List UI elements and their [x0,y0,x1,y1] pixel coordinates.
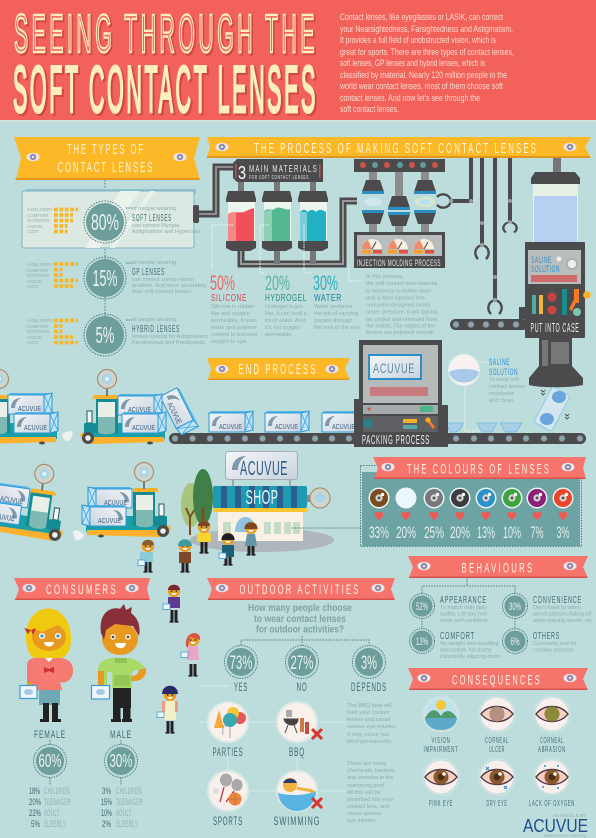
text: silicone: 50% [210,272,235,295]
percentages: 7% [530,523,544,542]
hybrid ratings: OUTDOOR [27,329,49,334]
text: silicone: permeable. It uses [211,318,257,324]
machine: 3 main materials: FOR SOFT CONTACT LENSES [249,175,309,181]
truck: loading top [80,370,166,444]
text: bbq warning: lenses and cause [347,717,391,723]
text: bbq warning: It may cause you [347,732,389,738]
percentages: 20% [396,523,416,542]
item: appearance: outfits. Let you feel [440,612,487,618]
item: others: 6% [510,636,520,648]
text: injection process: the soft contact lens material [366,281,437,287]
robot arms [437,158,520,318]
text: injection process: and is then injected into [366,296,425,302]
figure: female: FEMALE [34,729,66,741]
saline solution callout: To keep soft [489,377,520,383]
banner: outdoor: OUTDOOR ACTIVITIES [240,582,360,597]
icon: sports: SPORTS [213,816,243,828]
banner: end process [207,358,350,380]
text: hydrogel: it's not oxygen [265,325,301,331]
shop [181,452,334,552]
hybrid ratings: VISION [27,335,42,340]
question: for outdoor activities? [256,624,344,636]
panel: consumers: TEENAGER [116,797,143,808]
person: navy hat [157,686,178,734]
stat: 15 percent GP lenses: can correct certain vision [132,277,194,283]
icon: swimming [274,771,322,828]
item: appearance: To match with daily [440,605,487,611]
icon: dry eye: DRY EYE [486,798,508,808]
stat: 80 percent soft lenses: SOFT LENSES [132,213,172,224]
icon: swimming: SWIMMING [274,816,320,828]
credit: acuvue: ACUVUE [523,816,588,836]
contact lens cases on conveyor [446,423,522,432]
icon: corneal abrasion [534,696,570,754]
female age breakdown: ADULT [44,808,60,819]
truck: front top: ACUVUE [18,404,41,413]
intro paragraph: soft contact lenses. [340,104,399,115]
female age breakdown [29,786,71,830]
truck: delivery lower left [0,456,72,543]
saline solution callout: contact lenses [489,384,525,390]
machine: injection molding: INJECTION MOLDING PROCESS [357,258,441,269]
saline solution callout: SALINE [489,357,510,367]
text: bbq warning: melt your contact [347,710,390,716]
text: silicone: Silicone is rubber- [211,304,256,310]
stat: depends [351,646,387,694]
text: bbq warning: blind permanently. [347,739,393,745]
percentages: 13% [477,523,495,542]
stat: no [286,646,318,694]
saline solution callout: and clean. [489,398,515,404]
text: hydrogel: Hydrogel is gel- [265,304,304,310]
truck: delivery lower right: ACUVUE [104,498,127,507]
item: others: OTHERS [533,631,560,642]
text: hydrogel: like, it can hold a [265,311,308,317]
panel: types of contact lenses [14,137,209,356]
text: hydrogel: 20% [265,272,290,295]
customers at shop [138,521,258,734]
text: swimming warning: swimming pool. [347,783,386,789]
stat: female 60 percent [34,740,66,785]
trees [181,469,213,535]
stat: 80 percent soft lenses: 80% [91,209,119,235]
item: appearance: 52% [416,601,428,613]
intro paragraph: classified by material. Nearly 120 million people in the [340,70,507,81]
item: others [502,628,577,654]
text: hydrogel [265,272,308,338]
boxes on conveyor: ACUVUE [219,422,242,431]
intro paragraph: great for sports. There are three types of contact lenses, [340,47,514,58]
male age breakdown: ELDERLY [116,819,138,830]
figure: male [92,604,146,741]
tank: water [298,191,328,251]
male age breakdown [101,786,143,830]
item: convenience: Don't have to worry [533,605,581,611]
truck: delivery lower right [73,462,171,540]
person: pink [181,633,200,677]
hybrid ratings: COST [27,340,40,345]
truck: delivery lower right: ACUVUE [98,516,121,525]
banner: colours [373,457,586,479]
text: injection process: is heated to a molten state [366,288,432,294]
stat: male 30 percent: 30% [110,751,132,771]
boxes on conveyor [209,411,366,432]
GP ratings: VISION [27,279,42,284]
person: blue dress [244,522,258,556]
panel: consumers [14,578,150,830]
text: swimming warning: absorbed into your [347,797,393,803]
item: others: Curiousity and for [533,641,577,647]
icon: vision impairment [423,696,459,754]
intro paragraph: It provides a full field of unobstructed vision, which is [340,35,496,46]
item: comfort: 13% [416,636,428,648]
male age breakdown: 3% [102,786,111,797]
GP ratings: COMFORT [27,268,49,273]
icon: dry eye [479,759,515,808]
machine: packing process: PACKING PROCESS [362,433,430,447]
text: water: 30% [313,272,338,295]
text: water: the job of carrying [314,311,358,317]
header panel [0,0,596,128]
stat: 5 percent hybrid lenses [84,314,209,356]
item: appearance: more self-confident. [440,618,490,624]
item: comfort: discomfort. No frame [440,648,492,654]
saline solution callout: moisturize [489,391,514,397]
panel: consumers: CHILDREN [44,786,70,797]
text: water: the lens to the eye. [314,325,362,331]
banner: outdoor [207,578,395,600]
item: appearance [410,594,490,624]
item: comfort: No weight and resulting [440,641,498,647]
person: teal coat [219,533,235,566]
tilted box: ACUVUE [165,401,184,425]
male age breakdown: 2% [102,819,111,830]
machine: put into case [519,158,591,387]
icon: corneal ulcer: CORNEAL [485,735,509,745]
banner: consumers [14,578,150,600]
banner: end process: END PROCESS [238,361,318,378]
text: silicone: like and oxygen [211,311,250,317]
panel: consumers: TEENAGER [44,797,71,808]
female age breakdown: ELDERLY [44,819,66,830]
GP ratings: A.DELIVERY [27,262,53,267]
stat: 80 percent soft lenses: of people wearing [132,206,176,212]
machine: injection molding [354,159,445,269]
saline solution callout [448,354,525,431]
soft lens ratings [27,207,78,234]
banner: behaviours [408,556,588,578]
person: purple [163,585,180,623]
banner: types: CONTACT LENSES [58,159,154,176]
percentages: 33% [369,523,389,542]
truck: front top: ACUVUE [24,423,47,432]
text: injection process: be cooled and removed from [366,317,438,323]
icon: vision impairment: IMPAIRMENT [424,744,458,754]
person: light blue [138,540,154,573]
connector lines [200,686,345,791]
panel: behaviours [408,556,594,660]
machine: packing process [354,340,448,447]
text: hydrogel: HYDROGEL [265,292,307,304]
female age breakdown: 5% [31,819,40,830]
machine: 3 main materials [233,159,323,183]
machine: 3 main materials: 3 [238,163,246,183]
icon: bbq [277,702,322,759]
icon: parties: PARTIES [212,747,244,759]
text: injection process: the molds. The edges of the [366,324,435,330]
text: swimming warning [347,761,396,824]
item: convenience: about glasses falling off [533,612,592,618]
stat: depends: 3% [361,653,377,674]
conveyor: lower [169,433,586,444]
percentages: 10% [503,523,521,542]
person: brown coat [178,539,192,573]
text: hydrogel: lot of water. And [265,318,305,324]
icon: sports [208,771,248,828]
hearts [375,512,567,520]
truck: front top [0,370,73,444]
figure: male: MALE [110,729,132,741]
soft lens ratings: COMFORT [27,213,49,218]
banner: behaviours: BEHAVIOURS [462,560,534,576]
stat: 5 percent hybrid lenses: HYBRID LENSES [132,324,180,335]
stat: 15 percent GP lenses: problem. And more accurately [132,283,207,289]
icon: parties [208,702,248,759]
female age breakdown: 22% [29,808,41,819]
stat: 5 percent hybrid lenses: Keratoconus and Presbyopia. [132,340,206,346]
text: silicone: water and polymer [210,325,257,331]
percentages: 20% [450,523,470,542]
conveyor: upper [450,319,528,330]
saline solution callout: SOLUTION [489,367,518,377]
stat: yes [224,646,258,694]
icon: corneal abrasion: ABRASION [538,744,566,754]
GP ratings: COST [27,284,40,289]
intro paragraph: your Nearsightedness, Farsightedness and Astigmatism. [340,24,513,35]
stat: male 30 percent [104,740,138,785]
stat: 5 percent hybrid lenses: of people wearing [132,317,176,323]
question: to wear contact lenses [254,614,346,625]
text: swimming warning: and amoeba in the [347,775,393,781]
text: swimming warning: There are many [347,761,387,767]
female age breakdown: 20% [29,797,41,808]
text: silicone: SILICONE [211,292,247,304]
stat: no: 27% [290,653,314,674]
soft lens ratings: VISION [27,224,42,229]
boxes on conveyor: ACUVUE [332,422,355,431]
stat: 15 percent GP lenses: than soft contact lenses. [132,289,193,295]
item: convenience: 30% [509,601,521,613]
panel: consequences [408,668,588,838]
icon: corneal abrasion: CORNEAL [540,735,564,745]
text: water [313,272,362,331]
percentages: 25% [424,523,444,542]
banner: types [14,137,200,180]
text: swimming warning: All this will be [347,790,381,796]
text: injection process: lenses are polished smooth. [366,330,436,336]
intro paragraph: soft lenses, GP lenses and hybrid lenses, which is [340,58,485,69]
truck: delivery lower left: ACUVUE [0,494,24,506]
icon: pink eye: PINK EYE [429,798,453,808]
female age breakdown: 18% [29,786,40,797]
banner: consumers: CONSUMERS [46,582,118,597]
machine: put into case: SOLUTION [531,264,560,274]
soft lens ratings: OUTDOOR [27,218,49,223]
text: swimming warning: cause serious [347,811,382,817]
text: bbq warning: The BBQ heat will [347,703,392,709]
stat: 80 percent soft lenses: can correct Myopia, [132,223,181,229]
stat: female 60 percent: 60% [38,751,62,771]
shop sign: ACUVUE [240,458,288,480]
soft lens panel [22,189,196,248]
stat: 80 percent soft lenses: Astigmatism and Hyperopia. [132,229,202,235]
icon: pink eye [423,759,459,808]
stat: depends: DEPENDS [351,682,387,694]
credit: acuvue: AN ARTICLE BY [553,813,586,818]
intro paragraph [339,12,514,115]
machine: 3 main materials: MAIN MATERIALS [249,164,318,175]
intro paragraph: contact lenses. And now let's see through the [340,93,480,104]
shop sign [226,452,298,488]
text: water: oxygen through [314,318,353,324]
boxes on conveyor: ACUVUE [275,422,298,431]
text: water: Water performs [314,304,353,310]
text: silicone: oxygen to eye. [211,339,248,345]
text: swimming warning: chemicals, bacteria [347,768,396,774]
icon: lack of oxygen [529,759,575,808]
item: comfort: COMFORT [440,631,475,642]
tilted box [160,387,199,436]
text: hydrogel: permeable. [265,332,293,338]
intro paragraph: Contact lenses, like eyeglasses or LASIK, can correct [340,12,503,23]
icon: corneal ulcer [479,696,515,754]
item: others: cosplay purpose. [533,648,576,654]
tank: hydrogel [262,191,292,251]
male age breakdown: 10% [101,808,112,819]
stat: 15 percent GP lenses: GP LENSES [132,267,165,278]
GP ratings: OUTDOOR [27,273,49,278]
stat: 15 percent GP lenses: 15% [92,265,118,291]
person: yellow [197,521,211,554]
panel: outdoor activities [200,578,397,828]
machine: packing process: ACUVUE [373,360,415,376]
text: water: WATER [314,292,342,304]
stat: 5 percent hybrid lenses: 5% [96,322,114,348]
title [13,4,320,128]
icon: bbq: BBQ [289,747,305,759]
panel: consumers: CHILDREN [116,786,142,797]
item: comfort: constantly slipping down. [440,654,503,660]
panel: colours of lenses [360,457,586,546]
banner: types: THE TYPES OF [67,141,145,158]
truck: loading top: ACUVUE [132,423,155,432]
male age breakdown: 15% [101,797,112,808]
material callout lines [212,224,363,281]
question [248,603,352,636]
truck: loading top: ACUVUE [128,405,151,414]
blister pack [534,387,570,431]
question: How many people choose [248,603,352,614]
icon: vision impairment: VISION [432,735,450,745]
soft lens ratings: A.DELIVERY [27,207,53,212]
text: bbq warning [347,703,397,745]
hybrid ratings [27,318,78,345]
text: injection process [366,274,438,336]
stat: 80 percent soft lenses [84,201,202,243]
intro paragraph: world wear contact lenses, most of them choose soft [339,81,503,92]
icon: corneal ulcer: ULCER [489,744,505,754]
stat: 15 percent GP lenses [84,257,207,299]
text: injection process: under pressure. It will quickly [366,310,438,316]
text: silicone: content to transmit [211,332,257,338]
shop link line [292,527,361,529]
text: silicone [210,272,257,345]
male age breakdown: ADULT [116,808,132,819]
lens swatches [368,488,574,508]
hybrid ratings: A.DELIVERY [27,318,53,323]
text: injection process: computer-designed molds [366,302,431,308]
stat: yes: YES [234,682,248,694]
GP ratings [27,262,78,289]
credit: acuvue: www.acuvue.com.my [544,833,587,838]
figure: female [20,608,73,741]
item: appearance: APPEARANCE [440,595,487,606]
text: swimming warning: eye injuries. [347,818,377,824]
text: injection process: In this process, [366,274,404,280]
text: bbq warning: serious eye injuries. [347,724,397,730]
stat: yes: 73% [230,653,253,674]
percentages: 3% [556,523,570,542]
pipes: material feed [193,167,357,264]
hybrid ratings: COMFORT [27,324,49,329]
text: swimming warning: contact lens, and [347,804,389,810]
machine: put into case: SALINE [531,255,552,265]
tank: silicone [226,191,256,251]
item: convenience: while playing sports, etc. [532,618,594,624]
stat: 5 percent hybrid lenses: lenses special for Astigmatism, [132,334,209,340]
soft lens ratings: COST [27,229,40,234]
percentages [369,523,570,542]
item: comfort [410,628,503,660]
stat: no: NO [296,682,308,694]
item: convenience [502,594,594,624]
shop: SHOP [246,487,278,509]
banner: consequences [408,668,588,690]
stat: 15 percent GP lenses: of people wearing [132,260,176,266]
